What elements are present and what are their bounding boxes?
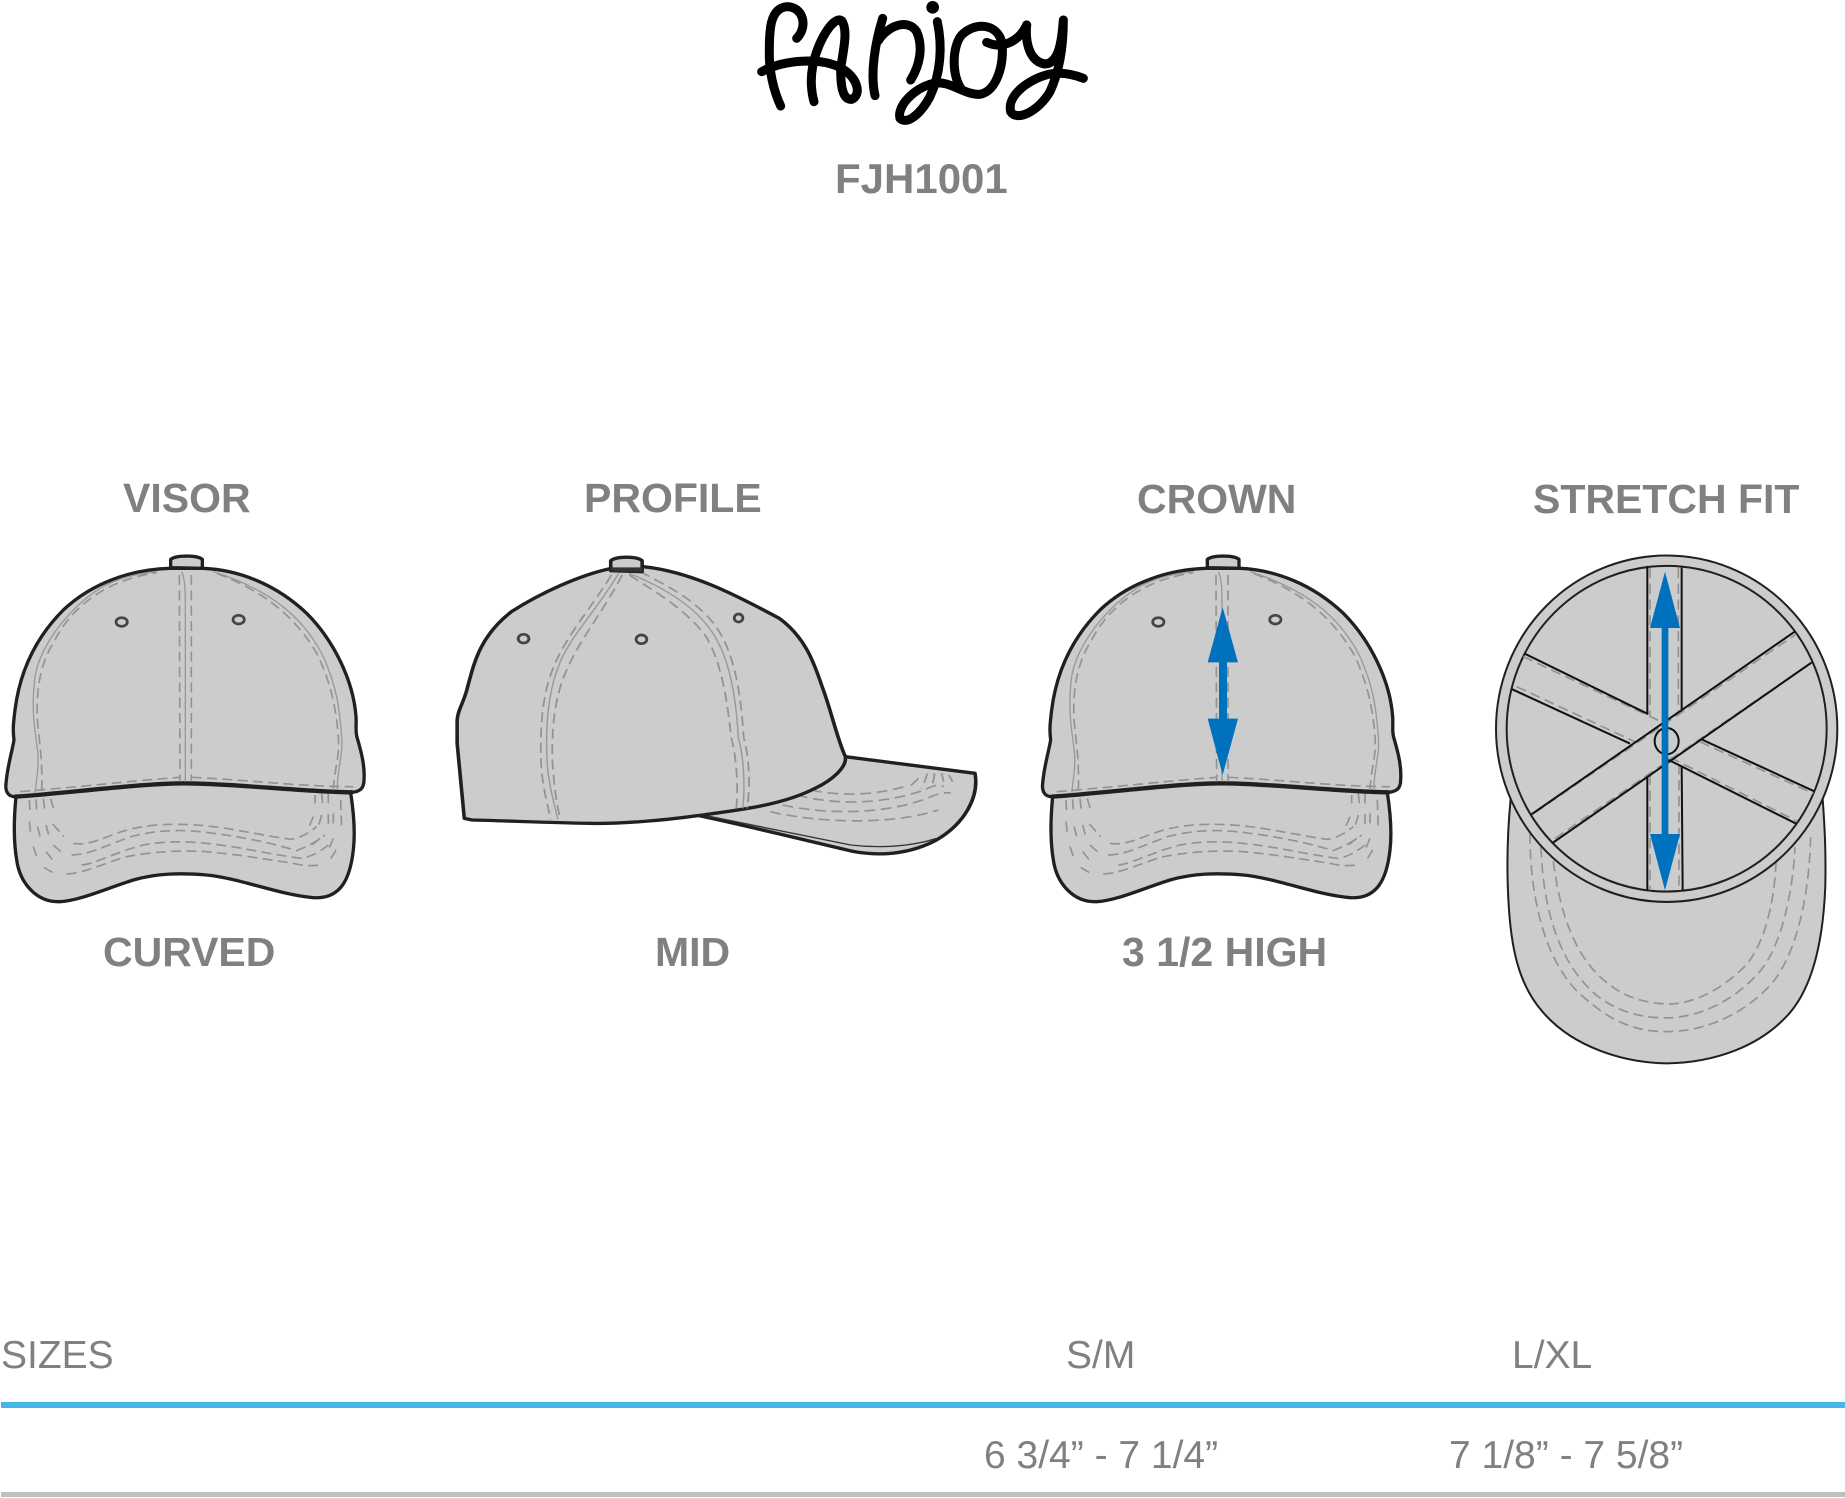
label: 3 1/2 high: 3 1/2 HIGH <box>1122 929 1327 975</box>
size value: S/M range: 6 3/4” - 7 1/4” <box>984 1434 1218 1477</box>
illustration: front cap, curved visor <box>6 556 364 902</box>
size table header: L/XL: L/XL <box>1512 1334 1592 1377</box>
arrow: stretch fit <box>1650 572 1680 890</box>
illustration: side profile cap <box>457 557 976 854</box>
divider: blue rule <box>1 1402 1845 1408</box>
heading: visor: VISOR <box>123 475 251 521</box>
heading: stretch fit: STRETCH FIT <box>1533 476 1799 522</box>
label: curved: CURVED <box>103 929 275 975</box>
underside visor <box>1507 799 1826 1063</box>
divider: grey rule <box>1 1492 1845 1497</box>
illustration: front cap with crown height arrow <box>1042 556 1401 902</box>
size value: L/XL range: 7 1/8” - 7 5/8” <box>1449 1434 1683 1477</box>
size table header: sizes: SIZES <box>1 1334 114 1377</box>
logo: fanjoy <box>762 1 1083 120</box>
heading: profile: PROFILE <box>584 475 762 521</box>
illustration: underside of cap <box>1496 556 1837 1063</box>
size table header: S/M: S/M <box>1066 1334 1135 1377</box>
heading: crown: CROWN <box>1137 476 1296 522</box>
sweatband ring and crown interior <box>1496 556 1837 902</box>
style code: FJH1001 <box>835 155 1008 202</box>
arrow: crown height <box>1208 607 1238 775</box>
label: mid: MID <box>655 929 730 975</box>
